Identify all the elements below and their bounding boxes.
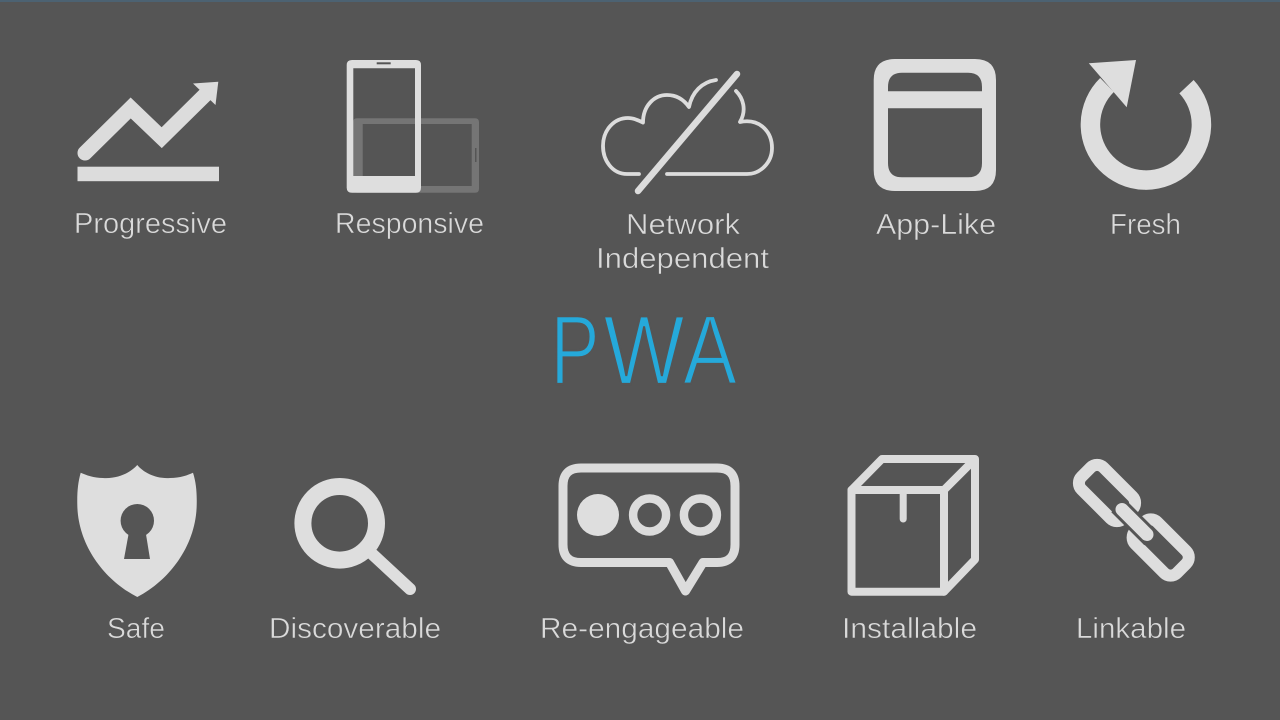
icon: crossed-out cloud: [603, 74, 772, 191]
label: Fresh: Fresh: [1110, 209, 1181, 241]
icon: progressive growth chart: [78, 82, 219, 181]
label: Safe: Safe: [107, 613, 165, 645]
icon: magnifying glass: [303, 486, 410, 589]
icon: chain links: [1075, 461, 1193, 579]
label: Progressive: Progressive: [74, 208, 227, 240]
label: Re-engageable: Re-engageable: [540, 613, 744, 645]
title: PWA: P: [550, 295, 600, 405]
icon: responsive phone and rotated phone: [347, 60, 479, 193]
label: Linkable: Linkable: [1076, 613, 1186, 645]
label: Network Independent: Independent: [596, 243, 769, 275]
label: Installable: Installable: [842, 613, 977, 645]
label: Discoverable: Discoverable: [269, 613, 441, 645]
title: PWA: [550, 295, 738, 405]
label: Network Independent: Network: [626, 209, 741, 241]
icon: app window: [874, 59, 996, 191]
icon: speech bubble with dots: [563, 468, 735, 591]
icon: box: [852, 459, 975, 592]
label: Responsive: Responsive: [335, 208, 484, 240]
icon: refresh arrow: [1089, 60, 1201, 180]
icon: shield with keyhole: [77, 465, 197, 597]
label: Network Independent: [596, 209, 769, 275]
title: PWA: A: [683, 295, 738, 405]
label: App-Like: App-Like: [876, 209, 996, 241]
title: PWA: W: [604, 295, 685, 405]
